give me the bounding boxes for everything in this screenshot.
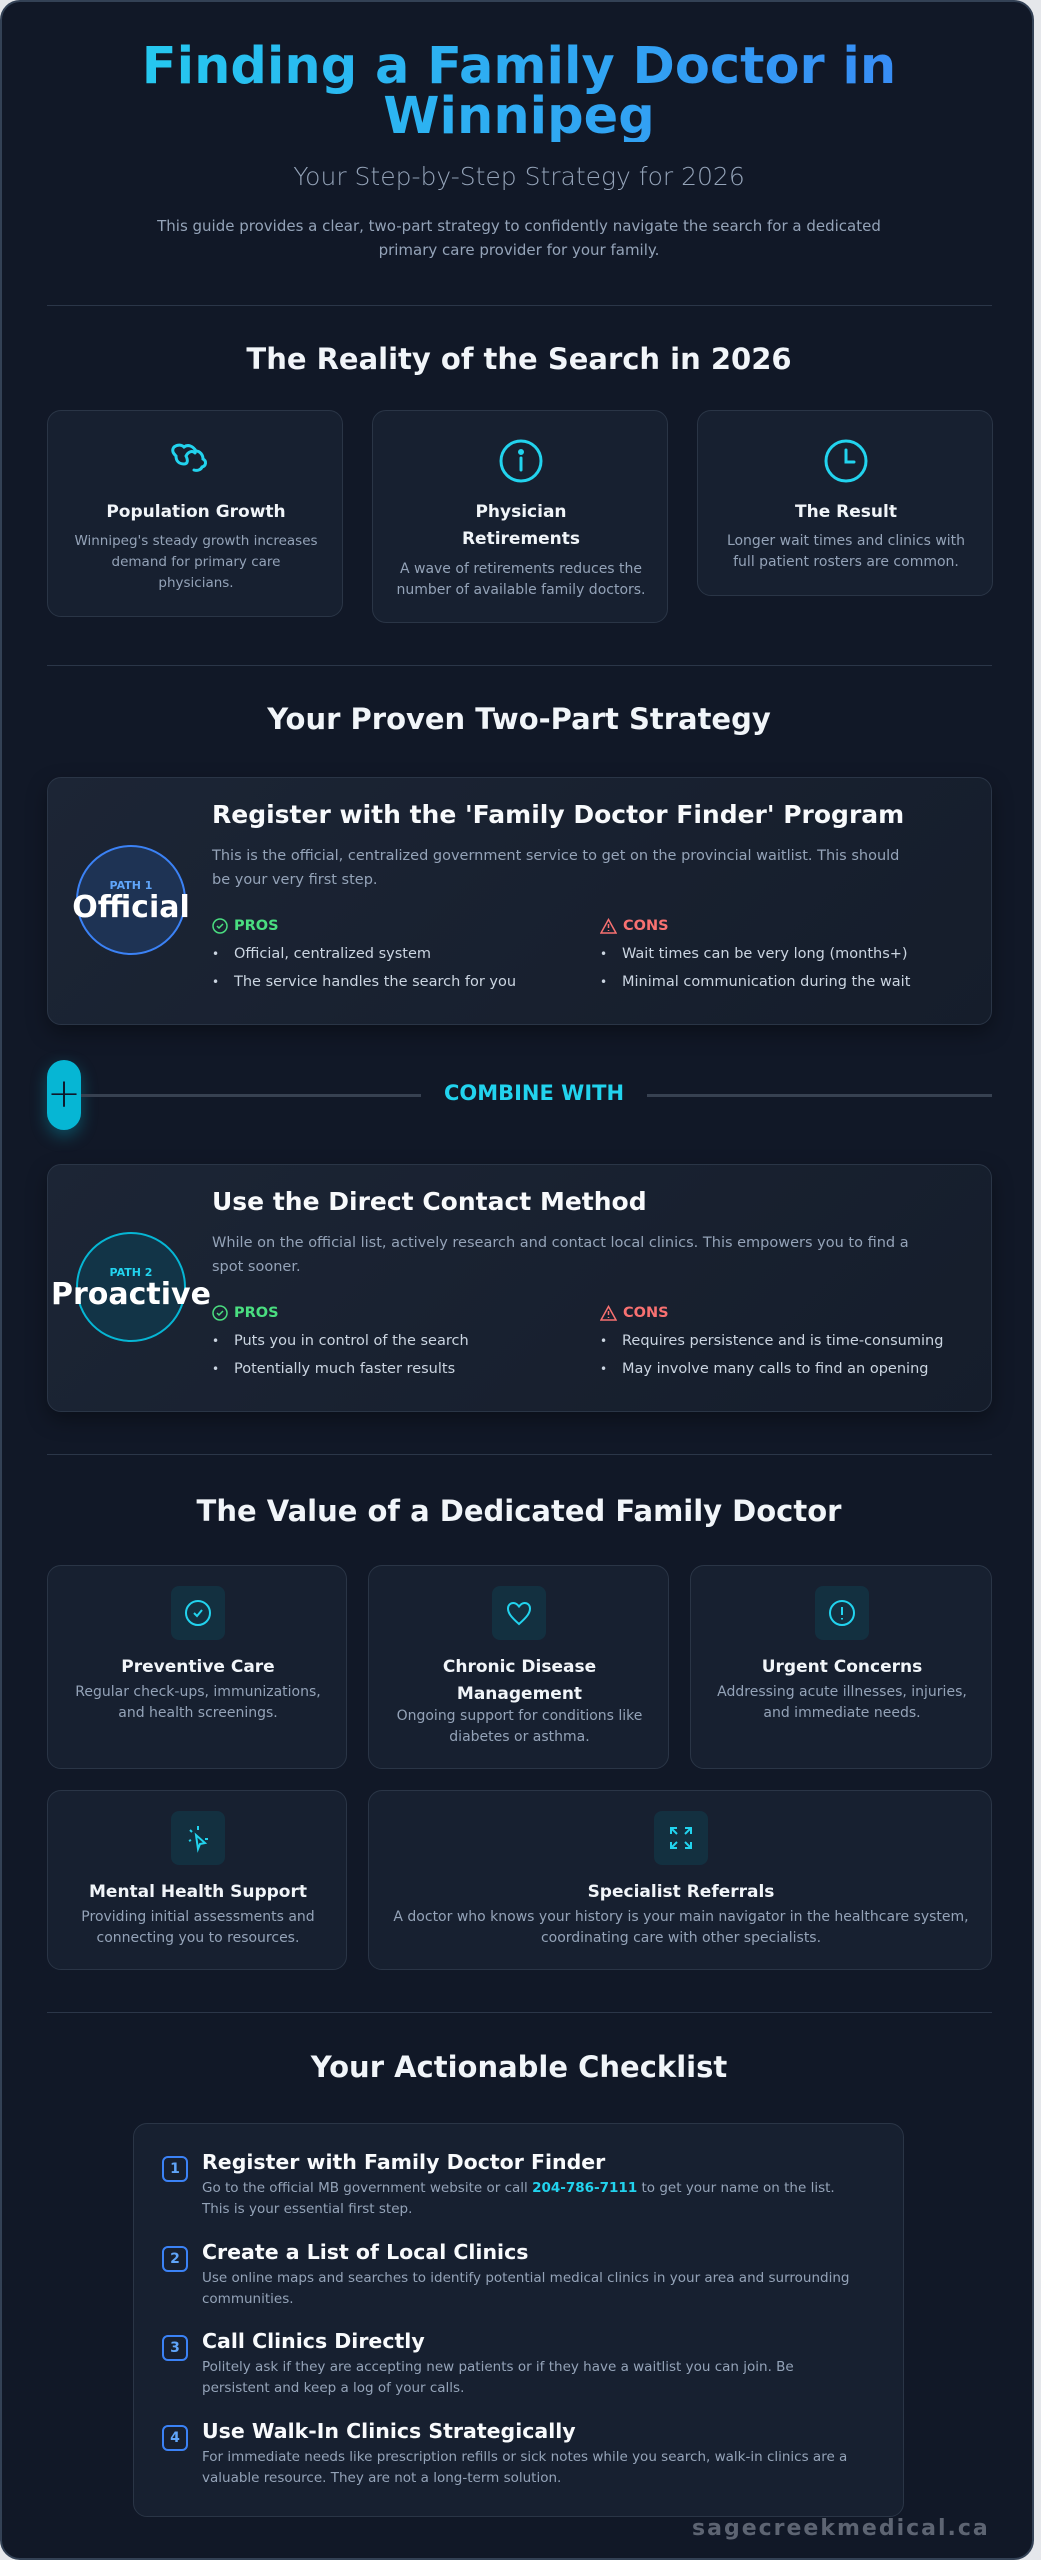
icon: map <box>171 444 207 472</box>
card: chronic disease: Management <box>457 1684 582 1704</box>
checklist item 3: Call Clinics Directly <box>202 2329 425 2353</box>
card: physician retirements <box>372 410 668 623</box>
checklist item 2: Use online maps and searches to identify potential medical clinics in your area and surrounding communities. <box>202 2270 849 2307</box>
card: population growth: Winnipeg's steady growth increases <box>74 533 318 549</box>
cons: May involve many calls to find an opening <box>622 1361 928 1377</box>
card: the result <box>697 410 993 596</box>
heading: value: The Value of a Dedicated Family Doctor <box>197 1494 841 1528</box>
pros: PROS <box>234 918 279 934</box>
icon: cursor click <box>171 1811 225 1865</box>
card: chronic disease: Chronic Disease <box>443 1657 596 1677</box>
card: specialist referrals: A doctor who knows your history is your main navigator in the healthcare system, coordinating care with other specialists. <box>393 1909 969 1946</box>
icon: plus pill <box>47 1060 81 1130</box>
card: urgent concerns <box>690 1565 992 1769</box>
combine with connector: COMBINE WITH <box>444 1081 624 1105</box>
icon: check <box>171 1586 225 1640</box>
subtitle: Your Step-by-Step Strategy for 2026 <box>293 162 745 191</box>
combine with connector <box>39 1060 992 1142</box>
pros <box>212 1305 469 1377</box>
card: physician retirements: A wave of retirements reduces the number of available family doctors. <box>396 561 646 598</box>
badge: path 1: PATH 1 <box>110 879 152 892</box>
card: preventive care <box>47 1565 347 1769</box>
badge: path 1 <box>76 845 186 955</box>
heading: reality: The Reality of the Search in 2026 <box>246 342 792 376</box>
card: population growth: demand for primary care <box>112 554 280 570</box>
card: population growth: physicians. <box>158 575 234 591</box>
card: physician retirements: Physician <box>475 502 567 522</box>
cons: CONS <box>623 918 669 934</box>
icon: clock <box>824 440 868 482</box>
watermark: sagecreekmedical.ca <box>692 2516 990 2541</box>
pros: The service handles the search for you <box>234 974 516 990</box>
checklist item 1: Go to the official MB government website or call 204-786-7111 to get your name on the list. This is your essential first step. <box>202 2180 835 2217</box>
heading: checklist: Your Actionable Checklist <box>311 2050 727 2084</box>
checklist item 2: Create a List of Local Clinics <box>202 2240 528 2264</box>
panel: path 2: While on the official list, actively research and contact local clinics. This empowers you to find a spot sooner. <box>212 1235 909 1275</box>
icon: info <box>500 440 542 482</box>
checklist item 3: Politely ask if they are accepting new patients or if they have a waitlist you can join. Be persistent and keep a log of your calls. <box>202 2359 794 2396</box>
panel: path 1: This is the official, centralized government service to get on the provincial waitlist. This should be your very first step. <box>212 848 899 888</box>
pros: PROS <box>234 1305 279 1321</box>
checklist item 4: For immediate needs like prescription refills or sick notes while you search, walk-in clinics are a valuable resource. They are not a long-term solution. <box>202 2449 847 2486</box>
cons: Wait times can be very long (months+) <box>622 946 908 962</box>
title <box>2 42 1036 142</box>
panel: path 2: Use the Direct Contact Method <box>212 1187 647 1216</box>
icon: alert <box>815 1586 869 1640</box>
pros: Puts you in control of the search <box>234 1333 469 1349</box>
title: Winnipeg <box>383 87 655 146</box>
intro text: This guide provides a clear, two-part strategy to confidently navigate the search for a dedicated primary care provider for your family. <box>157 217 881 259</box>
checklist item 4: 4 <box>170 2430 180 2446</box>
heading: strategy: Your Proven Two-Part Strategy <box>267 702 771 736</box>
icon: heart <box>492 1586 546 1640</box>
title: Finding a Family Doctor in <box>142 37 896 96</box>
cons <box>600 918 910 990</box>
panel: path 1 <box>47 777 992 1025</box>
card: chronic disease: Ongoing support for conditions like diabetes or asthma. <box>397 1708 642 1745</box>
panel: checklist <box>133 2123 904 2517</box>
checklist item 1: Register with Family Doctor Finder <box>202 2150 605 2174</box>
pros: Potentially much faster results <box>234 1361 455 1377</box>
card: urgent concerns: Addressing acute illnesses, injuries, and immediate needs. <box>717 1684 967 1721</box>
cons: Requires persistence and is time-consuming <box>622 1333 943 1349</box>
card: the result: Longer wait times and clinics with full patient rosters are common. <box>727 533 965 570</box>
pros <box>212 918 516 990</box>
cons <box>600 1305 943 1377</box>
card: specialist referrals: Specialist Referrals <box>588 1882 774 1902</box>
checklist item 3 <box>162 2329 794 2396</box>
card: preventive care: Regular check-ups, immunizations, and health screenings. <box>75 1684 321 1721</box>
card: specialist referrals <box>368 1790 992 1970</box>
checklist item 3: 3 <box>170 2340 180 2356</box>
panel: path 2 <box>47 1164 992 1412</box>
icon: arrows <box>654 1811 708 1865</box>
card: the result: The Result <box>795 502 897 522</box>
checklist item 2 <box>162 2240 849 2307</box>
panel: path 1: Register with the 'Family Doctor Finder' Program <box>212 800 904 829</box>
card: preventive care: Preventive Care <box>121 1657 275 1677</box>
cons: Minimal communication during the wait <box>622 974 910 990</box>
card: population growth <box>47 410 343 617</box>
checklist item 4: Use Walk-In Clinics Strategically <box>202 2419 576 2443</box>
badge: path 2 <box>76 1232 186 1342</box>
badge: path 2: Proactive <box>51 1277 211 1312</box>
checklist item 2: 2 <box>170 2251 180 2267</box>
card: population growth: Population Growth <box>106 502 286 522</box>
card: chronic disease <box>368 1565 669 1769</box>
card: mental health: Mental Health Support <box>89 1882 307 1902</box>
cons: CONS <box>623 1305 669 1321</box>
card: urgent concerns: Urgent Concerns <box>762 1657 922 1677</box>
card: mental health <box>47 1790 347 1970</box>
checklist item 1: 1 <box>170 2161 180 2177</box>
badge: path 1: Official <box>72 890 190 925</box>
checklist item 4 <box>162 2419 847 2486</box>
icon: plus pill: + <box>47 1071 81 1117</box>
card: physician retirements: Retirements <box>462 529 580 549</box>
pros: Official, centralized system <box>234 946 431 962</box>
card: mental health: Providing initial assessments and connecting you to resources. <box>81 1909 315 1946</box>
badge: path 2: PATH 2 <box>110 1266 152 1279</box>
checklist item 1 <box>162 2150 835 2217</box>
